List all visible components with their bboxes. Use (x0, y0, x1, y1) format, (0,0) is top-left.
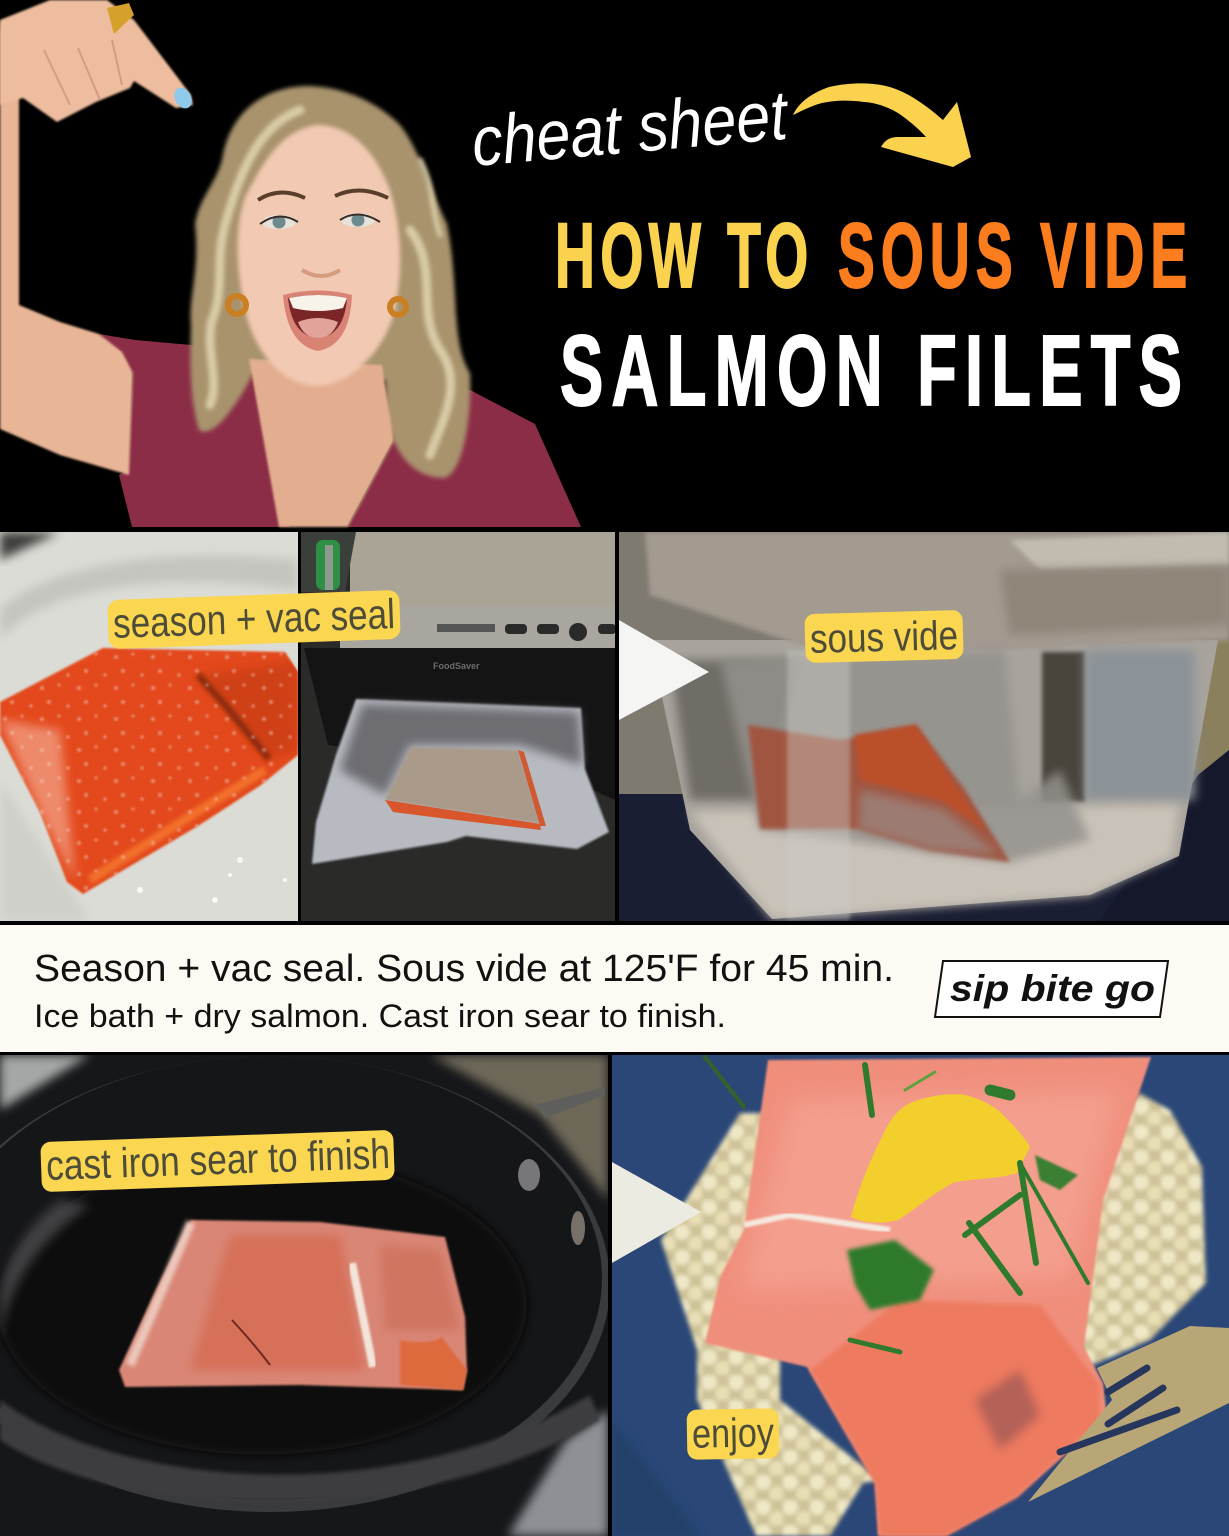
FoodSaver brand: FoodSaver (433, 661, 480, 671)
ring (107, 3, 134, 34)
pan rivets (518, 1159, 540, 1191)
icon: white arrow between steps (619, 620, 709, 720)
salmon in bag (748, 725, 1010, 862)
label: season + vac seal: season + vac seal (112, 590, 396, 647)
salmon filet (705, 1057, 1151, 1536)
blue nail (171, 85, 195, 111)
neck and chest (249, 359, 394, 527)
eyes and brows (258, 190, 388, 229)
hair highlights (210, 110, 451, 455)
water back panels (1042, 652, 1085, 802)
plastic container (650, 640, 1218, 919)
salmon flesh flakes (810, 1300, 1100, 1536)
shirt (99, 334, 581, 527)
title line 2: SALMON FILETS (560, 315, 1182, 426)
panel: seasoned salmon on plate (0, 532, 298, 921)
label: sous vide: sous vide (809, 612, 959, 662)
sealer buttons (437, 623, 616, 641)
logo: sip bite go: sip bite go (950, 968, 1155, 1009)
title line 1 (555, 205, 1187, 308)
panel: salmon in sous vide water bath (619, 532, 1229, 921)
handwritten heading: cheat sheet: cheat sheet (469, 76, 792, 181)
face (238, 125, 400, 386)
green handle (301, 532, 356, 592)
lemon wedge (851, 1094, 1030, 1223)
panel: salmon searing in cast iron (0, 1055, 610, 1536)
container lid band (645, 532, 1229, 650)
label: cast iron sear to finish: cast iron sear to finish (45, 1130, 391, 1189)
knuckle creases (44, 40, 122, 105)
instruction band (0, 925, 1229, 1052)
sealer machine (304, 648, 615, 800)
panel: finished salmon on plate (612, 1055, 1229, 1536)
nose (302, 270, 340, 276)
seared salmon (119, 1220, 467, 1390)
icon: white arrow between final steps (612, 1162, 701, 1263)
panel: vacuum sealer with bagged salmon (301, 532, 616, 921)
instruction line 2: Ice bath + dry salmon. Cast iron sear to finish. (34, 998, 726, 1034)
presenter photo: woman pointing down (0, 0, 581, 527)
herbs (705, 1057, 1088, 1352)
salt grains on plate (137, 857, 287, 903)
gold fork (1028, 1326, 1229, 1502)
cast iron pan (0, 1056, 610, 1512)
bag (720, 650, 1090, 862)
label: enjoy: enjoy (692, 1409, 775, 1457)
bagged salmon (385, 747, 540, 824)
hair (191, 86, 470, 478)
instruction line 1: Season + vac seal. Sous vide at 125'F for 45 min. (34, 948, 894, 990)
title line 1: SOUS VIDE (838, 205, 1187, 308)
pearl couscous (661, 1093, 1206, 1536)
salmon shading and salt (0, 640, 298, 900)
vacuum bag (312, 699, 609, 864)
open mouth (283, 290, 352, 351)
raised arm (0, 20, 133, 475)
earrings (228, 296, 406, 315)
salmon filet (0, 648, 298, 894)
icon: yellow curved arrow (793, 83, 971, 167)
pan handle bracket (535, 1087, 605, 1118)
pointing hand (0, 0, 193, 122)
logo: sip bite go (935, 961, 1168, 1017)
title line 1: HOW TO (555, 205, 808, 308)
